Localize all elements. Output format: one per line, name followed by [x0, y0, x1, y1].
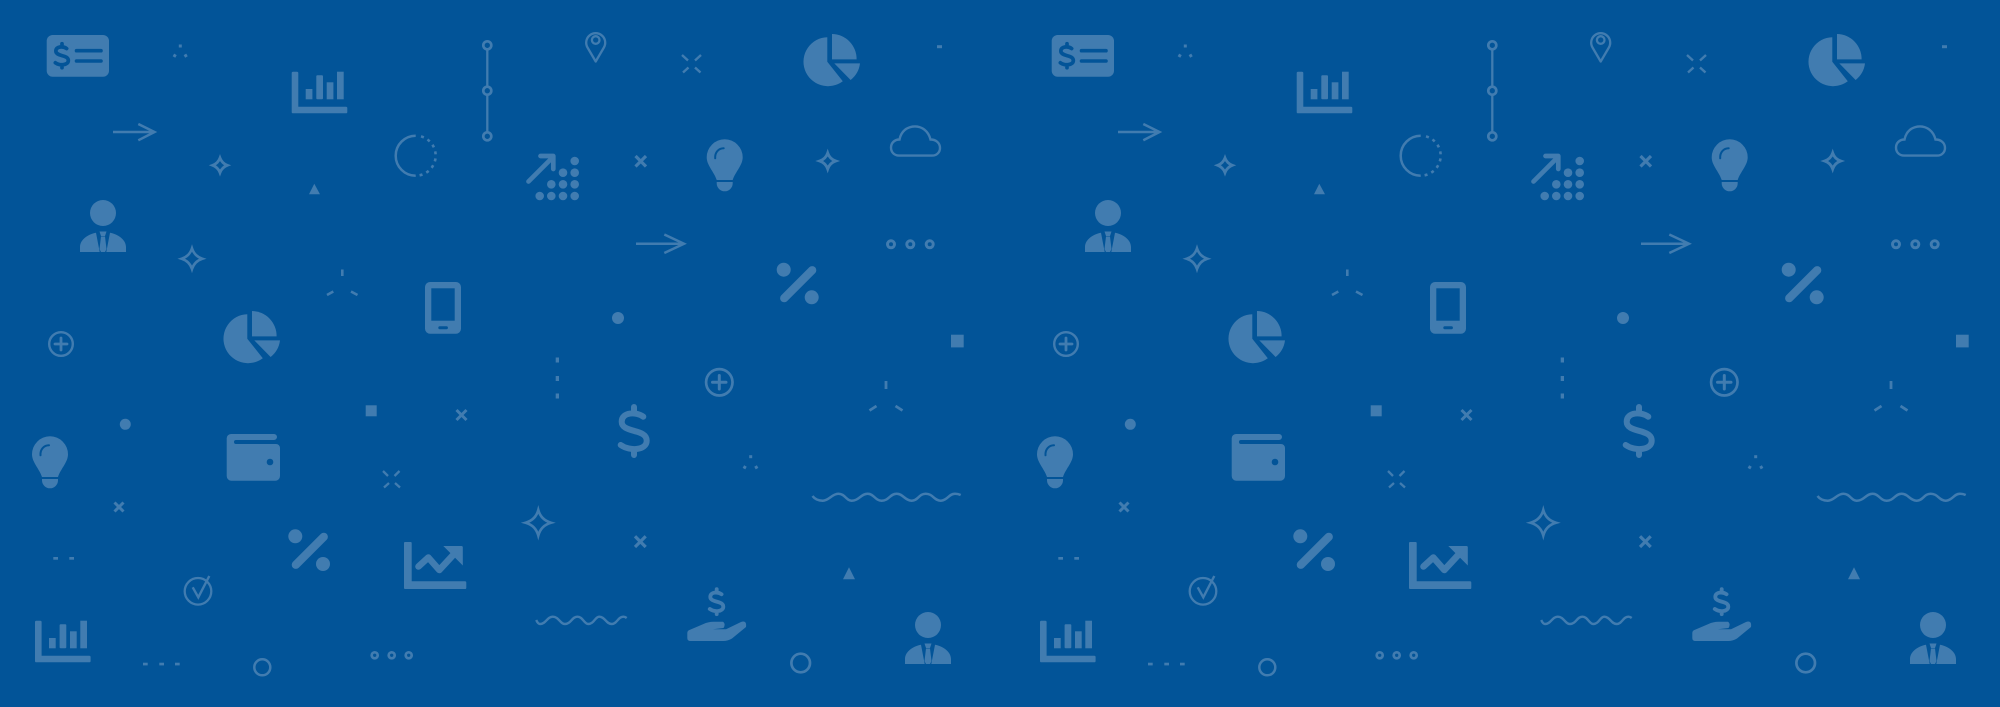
icon: wallet	[227, 434, 280, 481]
icon pattern tile (right, repeated)	[1037, 33, 1969, 675]
icon pattern tile (left)	[32, 33, 964, 675]
icon: person	[80, 200, 126, 252]
icon: location pin	[586, 33, 605, 62]
dots triple	[743, 455, 758, 469]
icon: growth arrow dots	[528, 156, 579, 200]
three ticks	[870, 381, 902, 410]
icon: percent	[288, 529, 330, 571]
icon: bar chart	[292, 72, 347, 113]
x mark	[635, 536, 646, 547]
icon: sparkle large	[526, 510, 551, 536]
dots triple	[173, 44, 188, 58]
x ticks	[682, 55, 701, 72]
icon: plus circle	[706, 369, 732, 395]
x mark	[456, 410, 466, 420]
triangle	[843, 567, 855, 579]
arrow	[636, 234, 684, 253]
icon: dollar card	[47, 35, 109, 77]
icon: hand with dollar	[687, 589, 746, 641]
icon: dashed circle	[396, 136, 436, 176]
x mark	[636, 156, 646, 166]
small dash	[937, 45, 942, 48]
icon: person	[905, 612, 951, 664]
icon: timeline nodes	[483, 41, 491, 140]
icon: cloud	[891, 126, 940, 156]
three rings	[372, 652, 412, 658]
arrow	[113, 124, 154, 140]
icon: pie chart	[803, 34, 860, 86]
three dashes	[143, 663, 180, 665]
icon: plus circle	[49, 332, 73, 356]
x ticks	[383, 471, 400, 488]
dot	[120, 419, 131, 430]
icon: sparkle small	[820, 153, 836, 169]
x mark	[114, 502, 124, 512]
icon: check circle	[185, 576, 211, 605]
wave	[536, 617, 627, 624]
ring	[254, 659, 270, 675]
icon: light bulb	[32, 436, 68, 488]
icon: light bulb	[707, 139, 743, 191]
icon: percent	[777, 263, 819, 304]
two dashes	[53, 557, 74, 560]
three ticks	[327, 270, 358, 295]
three rings	[888, 241, 933, 248]
icon: pie chart	[223, 311, 280, 363]
triangle	[309, 184, 320, 194]
ring	[791, 654, 810, 672]
icon: sparkle large	[182, 248, 202, 269]
icon: dollar sign	[621, 407, 647, 455]
wave	[812, 494, 961, 501]
square	[951, 335, 964, 347]
square	[366, 405, 377, 416]
icon: phone	[425, 282, 461, 334]
icon: bar chart	[35, 621, 91, 662]
icon: line chart	[404, 542, 466, 589]
icon: sparkle small	[213, 158, 227, 173]
dot	[612, 312, 624, 324]
vertical dashes	[556, 358, 559, 398]
